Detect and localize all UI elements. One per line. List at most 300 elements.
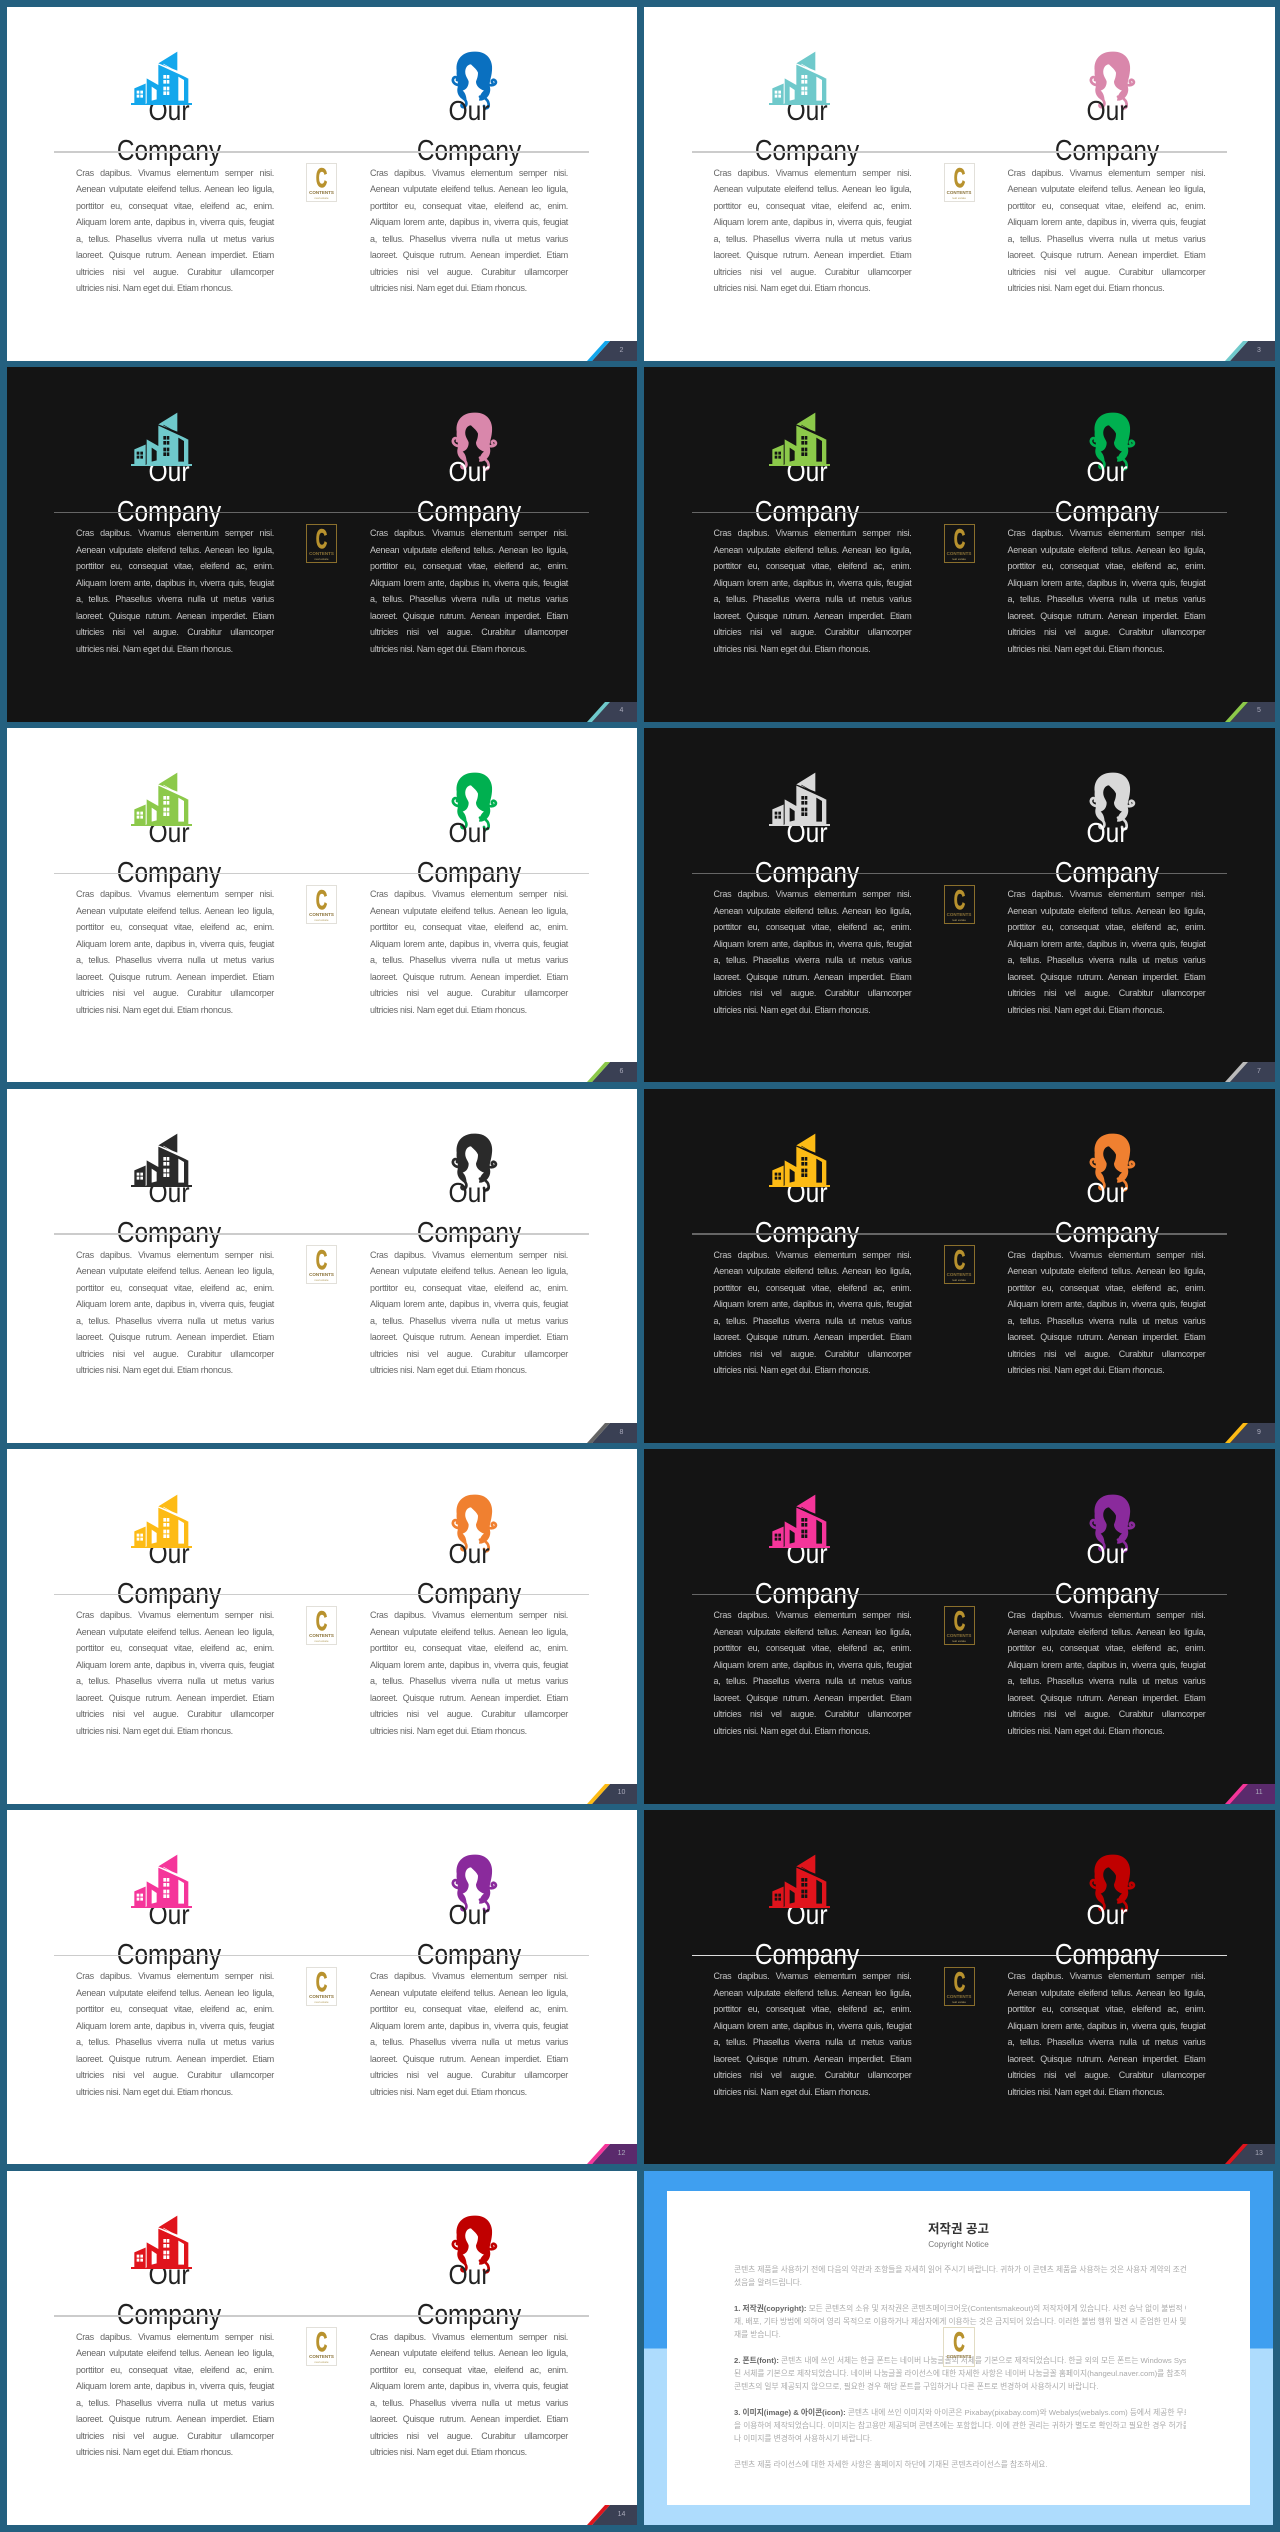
- title: left: [89, 2257, 249, 2329]
- text: left column: a, tellus. Phasellus viverra nulla ut metus varius: [714, 1316, 912, 1326]
- panel: slide 13 (dark, red): [644, 1810, 1274, 2164]
- text: left column: Aenean vulputate eleifend tellus. Aenean leo ligula,: [76, 1627, 274, 1637]
- page number: 13: [1255, 2150, 1263, 2157]
- icon: hair: [450, 2214, 498, 2279]
- text: left column: Cras dapibus. Vivamus elementum semper nisi.: [714, 889, 912, 899]
- text: left column: [714, 168, 912, 293]
- title: right: Company: [1054, 1939, 1159, 1971]
- text: right column: Aliquam lorem ante, dapibus in, viverra quis, feugiat: [370, 578, 568, 588]
- text: left column: Aliquam lorem ante, dapibus in, viverra quis, feugiat: [76, 1299, 274, 1309]
- title: left: Our: [786, 1899, 827, 1930]
- title: right: [417, 95, 522, 167]
- title: left: [89, 1897, 249, 1969]
- panel: slide 6 (white, green): [6, 728, 637, 1082]
- corner tab: [1225, 702, 1275, 722]
- title: left: Company: [117, 496, 221, 528]
- title: right: [417, 456, 522, 528]
- icon: building: [131, 52, 192, 105]
- text: left column: Cras dapibus. Vivamus elementum semper nisi.: [714, 1610, 912, 1620]
- icon: building: [769, 52, 830, 105]
- title: right: Company: [1054, 1217, 1159, 1249]
- logo: C: [953, 1245, 965, 1275]
- logo: [306, 2327, 337, 2366]
- logo: real estate: [952, 918, 966, 922]
- text: right column: porttitor eu, consequat vitae, eleifend ac, enim.: [1008, 922, 1206, 932]
- icon: building: [131, 412, 192, 466]
- text: right column: Aliquam lorem ante, dapibus in, viverra quis, feugiat: [1008, 2020, 1206, 2030]
- logo: [306, 524, 337, 563]
- text: left column: porttitor eu, consequat vitae, eleifend ac, enim.: [714, 922, 912, 932]
- page number: 12: [618, 2150, 625, 2157]
- text: left column: ultricies nisi vel augue. Curabitur ullamcorper: [76, 1709, 274, 1719]
- title: left: Company: [754, 857, 859, 889]
- text: right column: Aenean vulputate eleifend tellus. Aenean leo ligula,: [370, 184, 568, 194]
- text: right column: laoreet. Quisque rutrum. Aenean imperdiet. Etiam: [1008, 250, 1206, 260]
- text: right column: a, tellus. Phasellus viverra nulla ut metus varius: [370, 234, 568, 244]
- text: right column: Cras dapibus. Vivamus elementum semper nisi.: [370, 1610, 568, 1620]
- text: right column: porttitor eu, consequat vitae, eleifend ac, enim.: [1008, 201, 1206, 211]
- title: left: [89, 1536, 249, 1608]
- text: right column: [370, 2329, 568, 2461]
- text: left column: ultricies nisi. Nam eget dui. Etiam rhoncus.: [714, 2086, 870, 2096]
- text: left column: [76, 889, 274, 1015]
- text: left column: Cras dapibus. Vivamus elementum semper nisi.: [76, 889, 274, 899]
- text: right column: Aenean vulputate eleifend tellus. Aenean leo ligula,: [370, 1266, 568, 1276]
- text: left column: [714, 528, 912, 654]
- logo: C: [316, 1245, 327, 1275]
- text: left column: Cras dapibus. Vivamus elementum semper nisi.: [714, 168, 912, 178]
- text: right column: ultricies nisi. Nam eget dui. Etiam rhoncus.: [1008, 283, 1164, 293]
- text: right column: a, tellus. Phasellus viverra nulla ut metus varius: [370, 1676, 568, 1686]
- page number: 5: [1257, 707, 1261, 714]
- corner tab: [1214, 1423, 1274, 1443]
- corner tab: [1214, 1062, 1274, 1082]
- text: right column: Cras dapibus. Vivamus elementum semper nisi.: [1008, 168, 1206, 178]
- text: left column: ultricies nisi. Nam eget dui. Etiam rhoncus.: [76, 283, 233, 293]
- text: left column: [714, 1607, 912, 1739]
- icon: hair: [450, 1132, 498, 1197]
- text: right column: ultricies nisi vel augue. Curabitur ullamcorper: [1008, 627, 1206, 637]
- text: right column: ultricies nisi vel augue. Curabitur ullamcorper: [370, 2070, 568, 2080]
- text: left column: ultricies nisi vel augue. Curabitur ullamcorper: [76, 1349, 274, 1359]
- logo: C: [316, 2327, 327, 2357]
- logo: real estate: [952, 2000, 966, 2004]
- text: left column: ultricies nisi. Nam eget dui. Etiam rhoncus.: [76, 1365, 233, 1375]
- corner tab: [577, 1423, 637, 1443]
- logo: CONTENTS: [309, 190, 334, 195]
- text: right column: ultricies nisi. Nam eget dui. Etiam rhoncus.: [370, 283, 527, 293]
- text: left column: [76, 528, 274, 654]
- icon: hair: [1088, 1853, 1136, 1918]
- text: left column: Aenean vulputate eleifend tellus. Aenean leo ligula,: [714, 1627, 912, 1637]
- icon: hair: [452, 52, 498, 110]
- text: left column: Cras dapibus. Vivamus elementum semper nisi.: [76, 2332, 274, 2342]
- text: left column: Aliquam lorem ante, dapibus in, viverra quis, feugiat: [76, 217, 274, 227]
- text: right column: a, tellus. Phasellus viverra nulla ut metus varius: [1008, 234, 1206, 244]
- icon: hair: [452, 772, 498, 831]
- text: left column: laoreet. Quisque rutrum. Aenean imperdiet. Etiam: [76, 611, 274, 621]
- copyright body text: 셨음을 알려드립니다.: [734, 2278, 802, 2287]
- text: left column: ultricies nisi. Nam eget dui. Etiam rhoncus.: [714, 1365, 870, 1375]
- text: left column: Aenean vulputate eleifend tellus. Aenean leo ligula,: [76, 184, 274, 194]
- page number: 8: [620, 1429, 623, 1436]
- text: right column: ultricies nisi vel augue. Curabitur ullamcorper: [1008, 1349, 1206, 1359]
- text: left column: a, tellus. Phasellus viverra nulla ut metus varius: [76, 234, 274, 244]
- copyright body text: 나 이미지를 변경하여 사용하시기 바랍니다.: [734, 2434, 872, 2443]
- text: right column: ultricies nisi. Nam eget dui. Etiam rhoncus.: [1008, 1004, 1164, 1014]
- text: right column: [370, 889, 568, 1015]
- text: right column: Aliquam lorem ante, dapibus in, viverra quis, feugiat: [370, 2381, 568, 2391]
- text: right column: ultricies nisi. Nam eget dui. Etiam rhoncus.: [1008, 1726, 1164, 1736]
- logo: C: [316, 884, 327, 914]
- title: right: [1054, 817, 1160, 889]
- text: right column: porttitor eu, consequat vitae, eleifend ac, enim.: [370, 922, 568, 932]
- icon: hair: [450, 1493, 498, 1558]
- text: left column: porttitor eu, consequat vitae, eleifend ac, enim.: [76, 922, 274, 932]
- text: left column: Aliquam lorem ante, dapibus in, viverra quis, feugiat: [714, 217, 912, 227]
- text: left column: Aenean vulputate eleifend tellus. Aenean leo ligula,: [76, 906, 274, 916]
- text: left column: ultricies nisi vel augue. Curabitur ullamcorper: [714, 1709, 912, 1719]
- title: left: [89, 1175, 249, 1247]
- title: left: [726, 1175, 886, 1247]
- logo: [944, 163, 974, 202]
- text: right column: ultricies nisi. Nam eget dui. Etiam rhoncus.: [370, 1726, 527, 1736]
- text: left column: Cras dapibus. Vivamus elementum semper nisi.: [76, 168, 274, 178]
- text: left column: ultricies nisi. Nam eget dui. Etiam rhoncus.: [76, 2086, 233, 2096]
- text: right column: a, tellus. Phasellus viverra nulla ut metus varius: [1008, 594, 1206, 604]
- text: left column: laoreet. Quisque rutrum. Aenean imperdiet. Etiam: [76, 1693, 274, 1703]
- title: left: Company: [754, 1578, 859, 1610]
- text: left column: ultricies nisi vel augue. Curabitur ullamcorper: [714, 627, 912, 637]
- icon: hair: [450, 1853, 498, 1918]
- logo overlay: [943, 2327, 975, 2367]
- text: right column: Aliquam lorem ante, dapibus in, viverra quis, feugiat: [1008, 938, 1206, 948]
- text: left column: porttitor eu, consequat vitae, eleifend ac, enim.: [76, 2004, 274, 2014]
- text: left column: a, tellus. Phasellus viverra nulla ut metus varius: [714, 1676, 912, 1686]
- text: right column: porttitor eu, consequat vitae, eleifend ac, enim.: [370, 2004, 568, 2014]
- text: left column: ultricies nisi vel augue. Curabitur ullamcorper: [714, 2070, 912, 2080]
- logo: CONTENTS: [947, 1272, 971, 1277]
- text: left column: porttitor eu, consequat vitae, eleifend ac, enim.: [76, 561, 274, 571]
- page number: 6: [620, 1068, 623, 1075]
- logo: C: [953, 163, 965, 193]
- text: right column: laoreet. Quisque rutrum. Aenean imperdiet. Etiam: [370, 1332, 568, 1342]
- text: right column: Aenean vulputate eleifend tellus. Aenean leo ligula,: [370, 545, 568, 555]
- text: left column: laoreet. Quisque rutrum. Aenean imperdiet. Etiam: [714, 1332, 912, 1342]
- logo: real estate: [952, 196, 966, 200]
- text: left column: Aenean vulputate eleifend tellus. Aenean leo ligula,: [714, 1266, 912, 1276]
- title: left: Our: [786, 1538, 827, 1569]
- icon: building: [130, 1132, 193, 1189]
- panel: slide 8 (white, black): [6, 1089, 637, 1443]
- text: left column: Aliquam lorem ante, dapibus in, viverra quis, feugiat: [714, 1299, 912, 1309]
- text: left column: porttitor eu, consequat vitae, eleifend ac, enim.: [714, 201, 912, 211]
- logo: CONTENTS: [309, 1994, 334, 1998]
- icon: building: [130, 1493, 193, 1549]
- text: right column: ultricies nisi vel augue. Curabitur ullamcorper: [370, 627, 568, 637]
- icon: building: [768, 1493, 831, 1549]
- title: right: Company: [1054, 1578, 1159, 1610]
- text: right column: Aenean vulputate eleifend tellus. Aenean leo ligula,: [1008, 184, 1206, 194]
- text: left column: laoreet. Quisque rutrum. Aenean imperdiet. Etiam: [76, 1332, 274, 1342]
- text: right column: laoreet. Quisque rutrum. Aenean imperdiet. Etiam: [1008, 1332, 1206, 1342]
- corner tab: [587, 1062, 637, 1082]
- corner tab: [587, 702, 637, 722]
- text: left column: Aliquam lorem ante, dapibus in, viverra quis, feugiat: [714, 1660, 912, 1670]
- corner tab: [1225, 341, 1275, 361]
- logo: [306, 1966, 337, 2006]
- text: right column: ultricies nisi vel augue. Curabitur ullamcorper: [1008, 988, 1206, 998]
- text: left column: Aenean vulputate eleifend tellus. Aenean leo ligula,: [714, 1988, 912, 1998]
- page number: 7: [1257, 1068, 1261, 1075]
- title: right: Our: [448, 1177, 490, 1208]
- text: right column: [370, 1607, 568, 1739]
- logo: real estate: [314, 196, 328, 200]
- text: right column: ultricies nisi. Nam eget dui. Etiam rhoncus.: [370, 644, 527, 654]
- title: right: Company: [417, 2299, 521, 2331]
- text: left column: Cras dapibus. Vivamus elementum semper nisi.: [76, 1610, 274, 1620]
- text: right column: Cras dapibus. Vivamus elementum semper nisi.: [370, 1971, 568, 1981]
- text: left column: Aenean vulputate eleifend tellus. Aenean leo ligula,: [76, 545, 274, 555]
- text: right column: ultricies nisi. Nam eget dui. Etiam rhoncus.: [1008, 2086, 1164, 2096]
- title: right: [389, 2257, 549, 2329]
- icon: hair: [452, 412, 498, 471]
- logo: C: [316, 163, 327, 193]
- text: left column: laoreet. Quisque rutrum. Aenean imperdiet. Etiam: [76, 2054, 274, 2064]
- corner tab: [587, 341, 637, 361]
- text: left column: Aliquam lorem ante, dapibus in, viverra quis, feugiat: [76, 578, 274, 588]
- text: left column: Cras dapibus. Vivamus elementum semper nisi.: [76, 1250, 274, 1260]
- icon: hair: [1090, 412, 1136, 471]
- title: right: Company: [417, 496, 521, 528]
- text: right column: Cras dapibus. Vivamus elementum semper nisi.: [1008, 1971, 1206, 1981]
- text: left column: Aliquam lorem ante, dapibus in, viverra quis, feugiat: [714, 2020, 912, 2030]
- title: left: Our: [148, 1177, 190, 1208]
- title: left: Company: [117, 1939, 221, 1971]
- text: right column: Aenean vulputate eleifend tellus. Aenean leo ligula,: [370, 906, 568, 916]
- text: left column: laoreet. Quisque rutrum. Aenean imperdiet. Etiam: [714, 250, 912, 260]
- text: right column: [1008, 168, 1206, 293]
- text: right column: porttitor eu, consequat vitae, eleifend ac, enim.: [370, 2365, 568, 2375]
- title: left: [726, 1536, 886, 1608]
- text: right column: porttitor eu, consequat vitae, eleifend ac, enim.: [1008, 2004, 1206, 2014]
- corner tab: [577, 2144, 637, 2164]
- text: right column: a, tellus. Phasellus viverra nulla ut metus varius: [1008, 2037, 1206, 2047]
- text: left column: ultricies nisi. Nam eget dui. Etiam rhoncus.: [76, 644, 233, 654]
- title: left: Company: [754, 135, 859, 167]
- title: left: Our: [148, 1899, 190, 1930]
- text: right column: porttitor eu, consequat vitae, eleifend ac, enim.: [370, 201, 568, 211]
- text: right column: porttitor eu, consequat vitae, eleifend ac, enim.: [370, 1643, 568, 1653]
- icon: hair: [1088, 1493, 1136, 1558]
- title: right: Our: [448, 95, 490, 126]
- logo: C: [953, 884, 965, 914]
- text: right column: Aliquam lorem ante, dapibus in, viverra quis, feugiat: [370, 2020, 568, 2030]
- corner tab: [577, 1784, 637, 1804]
- text: right column: porttitor eu, consequat vitae, eleifend ac, enim.: [1008, 1643, 1206, 1653]
- text: right column: Aliquam lorem ante, dapibus in, viverra quis, feugiat: [370, 1660, 568, 1670]
- text: right column: Aliquam lorem ante, dapibus in, viverra quis, feugiat: [370, 938, 568, 948]
- text: left column: [76, 2329, 274, 2461]
- text: right column: a, tellus. Phasellus viverra nulla ut metus varius: [370, 594, 568, 604]
- text: right column: Aliquam lorem ante, dapibus in, viverra quis, feugiat: [1008, 1299, 1206, 1309]
- logo: C: [316, 1966, 327, 1996]
- copyright heading: 저작권 공고: [928, 2222, 989, 2236]
- panel: slide 5 (dark, green): [644, 367, 1274, 722]
- copyright body text: [734, 2263, 1186, 2471]
- text: right column: a, tellus. Phasellus viverra nulla ut metus varius: [370, 2037, 568, 2047]
- logo: real estate: [314, 1639, 328, 1643]
- text: right column: porttitor eu, consequat vitae, eleifend ac, enim.: [370, 1283, 568, 1293]
- text: right column: ultricies nisi. Nam eget dui. Etiam rhoncus.: [1008, 1365, 1164, 1375]
- text: right column: a, tellus. Phasellus viverra nulla ut metus varius: [370, 2398, 568, 2408]
- copyright body text: 콘텐츠 제품 라이선스에 대한 자세한 사항은 홈페이지 하단에 기재된 콘텐츠라이선스를 참조하세요.: [734, 2460, 1047, 2469]
- text: left column: laoreet. Quisque rutrum. Aenean imperdiet. Etiam: [714, 972, 912, 982]
- title: right: Company: [417, 1939, 521, 1971]
- text: left column: a, tellus. Phasellus viverra nulla ut metus varius: [76, 1316, 274, 1326]
- text: right column: Cras dapibus. Vivamus elementum semper nisi.: [370, 889, 568, 899]
- text: right column: ultricies nisi vel augue. Curabitur ullamcorper: [1008, 1709, 1206, 1719]
- panel: slide 11 (dark, pink): [644, 1449, 1274, 1804]
- text: right column: [1008, 1968, 1206, 2100]
- text: left column: a, tellus. Phasellus viverra nulla ut metus varius: [76, 1676, 274, 1686]
- corner tab: [1214, 2144, 1274, 2164]
- text: left column: Aenean vulputate eleifend tellus. Aenean leo ligula,: [714, 545, 912, 555]
- logo: C: [953, 1606, 965, 1636]
- text: left column: Aenean vulputate eleifend tellus. Aenean leo ligula,: [714, 906, 912, 916]
- text: right column: Aliquam lorem ante, dapibus in, viverra quis, feugiat: [1008, 217, 1206, 227]
- panel: slide 14 (white, red): [6, 2171, 637, 2525]
- logo: C: [953, 524, 965, 554]
- title: left: [726, 1897, 886, 1969]
- text: right column: ultricies nisi. Nam eget dui. Etiam rhoncus.: [370, 1365, 527, 1375]
- text: left column: porttitor eu, consequat vitae, eleifend ac, enim.: [76, 2365, 274, 2375]
- text: left column: porttitor eu, consequat vitae, eleifend ac, enim.: [714, 2004, 912, 2014]
- text: right column: laoreet. Quisque rutrum. Aenean imperdiet. Etiam: [370, 2414, 568, 2424]
- text: left column: laoreet. Quisque rutrum. Aenean imperdiet. Etiam: [714, 611, 912, 621]
- text: left column: [76, 1247, 274, 1379]
- text: right column: ultricies nisi vel augue. Curabitur ullamcorper: [370, 2431, 568, 2441]
- text: right column: laoreet. Quisque rutrum. Aenean imperdiet. Etiam: [370, 1693, 568, 1703]
- page number: 2: [620, 347, 623, 354]
- title: right: Our: [1086, 817, 1127, 848]
- text: right column: Aliquam lorem ante, dapibus in, viverra quis, feugiat: [370, 1299, 568, 1309]
- logo: [306, 1606, 337, 1645]
- logo: [944, 1245, 974, 1284]
- text: right column: ultricies nisi. Nam eget dui. Etiam rhoncus.: [1008, 644, 1164, 654]
- text: right column: Cras dapibus. Vivamus elementum semper nisi.: [1008, 528, 1206, 538]
- title: left: Our: [148, 1538, 190, 1569]
- title: right: Our: [1086, 1177, 1127, 1208]
- text: left column: Cras dapibus. Vivamus elementum semper nisi.: [76, 1971, 274, 1981]
- text: right column: Aenean vulputate eleifend tellus. Aenean leo ligula,: [1008, 1988, 1206, 1998]
- logo: [306, 884, 337, 924]
- title: left: [754, 456, 860, 528]
- text: left column: ultricies nisi vel augue. Curabitur ullamcorper: [714, 988, 912, 998]
- text: right column: a, tellus. Phasellus viverra nulla ut metus varius: [1008, 1676, 1206, 1686]
- text: right column: ultricies nisi. Nam eget dui. Etiam rhoncus.: [370, 2086, 527, 2096]
- title: left: [754, 95, 860, 167]
- text: right column: Cras dapibus. Vivamus elementum semper nisi.: [1008, 1610, 1206, 1620]
- text: right column: ultricies nisi vel augue. Curabitur ullamcorper: [370, 267, 568, 277]
- title: left: Company: [117, 135, 221, 167]
- panel: slide 12 (white, pink): [6, 1810, 637, 2164]
- title: right: [1054, 95, 1160, 167]
- text: right column: ultricies nisi vel augue. Curabitur ullamcorper: [370, 1709, 568, 1719]
- text: left column: a, tellus. Phasellus viverra nulla ut metus varius: [76, 594, 274, 604]
- text: left column: porttitor eu, consequat vitae, eleifend ac, enim.: [76, 1643, 274, 1653]
- title: left: Company: [754, 496, 859, 528]
- text: right column: [370, 168, 568, 293]
- icon: hair: [1090, 772, 1136, 831]
- logo: real estate: [314, 2360, 328, 2364]
- text: right column: [1008, 886, 1206, 1018]
- corner tab: [1214, 1784, 1274, 1804]
- text: left column: Cras dapibus. Vivamus elementum semper nisi.: [714, 1971, 912, 1981]
- panel: copyright notice: [644, 2171, 1273, 2525]
- text: left column: Aenean vulputate eleifend tellus. Aenean leo ligula,: [714, 184, 912, 194]
- text: right column: Aenean vulputate eleifend tellus. Aenean leo ligula,: [1008, 1627, 1206, 1637]
- text: left column: Cras dapibus. Vivamus elementum semper nisi.: [714, 528, 912, 538]
- text: left column: Cras dapibus. Vivamus elementum semper nisi.: [76, 528, 274, 538]
- text: right column: porttitor eu, consequat vitae, eleifend ac, enim.: [1008, 1283, 1206, 1293]
- text: left column: ultricies nisi vel augue. Curabitur ullamcorper: [76, 627, 274, 637]
- page number: 9: [1257, 1429, 1261, 1436]
- title: left: Our: [148, 456, 190, 487]
- title: right: [1054, 456, 1160, 528]
- text: left column: a, tellus. Phasellus viverra nulla ut metus varius: [714, 234, 912, 244]
- text: right column: Aenean vulputate eleifend tellus. Aenean leo ligula,: [1008, 1266, 1206, 1276]
- copyright body text: 재를 받습니다.: [734, 2330, 781, 2339]
- icon: building: [769, 412, 830, 466]
- text: right column: ultricies nisi vel augue. Curabitur ullamcorper: [1008, 267, 1206, 277]
- logo: CONTENTS: [309, 551, 334, 556]
- icon: building: [131, 772, 192, 826]
- text: right column: a, tellus. Phasellus viverra nulla ut metus varius: [370, 955, 568, 965]
- text: left column: ultricies nisi. Nam eget dui. Etiam rhoncus.: [76, 2447, 233, 2457]
- title: right: [1026, 1175, 1186, 1247]
- title: right: Company: [417, 135, 521, 167]
- title: right: Company: [1054, 135, 1159, 167]
- logo: real estate: [314, 2000, 328, 2004]
- text: left column: ultricies nisi vel augue. Curabitur ullamcorper: [76, 2070, 274, 2080]
- text: right column: ultricies nisi vel augue. Curabitur ullamcorper: [370, 1349, 568, 1359]
- title: left: Our: [786, 95, 827, 126]
- title: right: Our: [1086, 1899, 1127, 1930]
- title: right: Our: [1086, 1538, 1127, 1569]
- logo overlay: C: [953, 2327, 965, 2357]
- text: right column: Cras dapibus. Vivamus elementum semper nisi.: [370, 168, 568, 178]
- text: left column: [76, 1968, 274, 2100]
- icon: building: [768, 1132, 831, 1189]
- text: right column: Cras dapibus. Vivamus elementum semper nisi.: [370, 1250, 568, 1260]
- text: left column: Aenean vulputate eleifend tellus. Aenean leo ligula,: [76, 1988, 274, 1998]
- text: left column: a, tellus. Phasellus viverra nulla ut metus varius: [714, 2037, 912, 2047]
- text: left column: a, tellus. Phasellus viverra nulla ut metus varius: [714, 955, 912, 965]
- title: right: Our: [448, 2259, 490, 2290]
- icon: building: [769, 772, 830, 826]
- title: right: Company: [417, 1217, 521, 1249]
- text: right column: laoreet. Quisque rutrum. Aenean imperdiet. Etiam: [370, 972, 568, 982]
- text: left column: a, tellus. Phasellus viverra nulla ut metus varius: [76, 2398, 274, 2408]
- title: left: [117, 817, 222, 889]
- title: left: Company: [117, 857, 221, 889]
- logo: real estate: [952, 1278, 966, 1282]
- logo: [306, 1245, 337, 1284]
- logo: CONTENTS: [947, 1633, 971, 1638]
- panel: slide 4 (dark, teal): [6, 367, 637, 722]
- text: left column: ultricies nisi. Nam eget dui. Etiam rhoncus.: [714, 644, 870, 654]
